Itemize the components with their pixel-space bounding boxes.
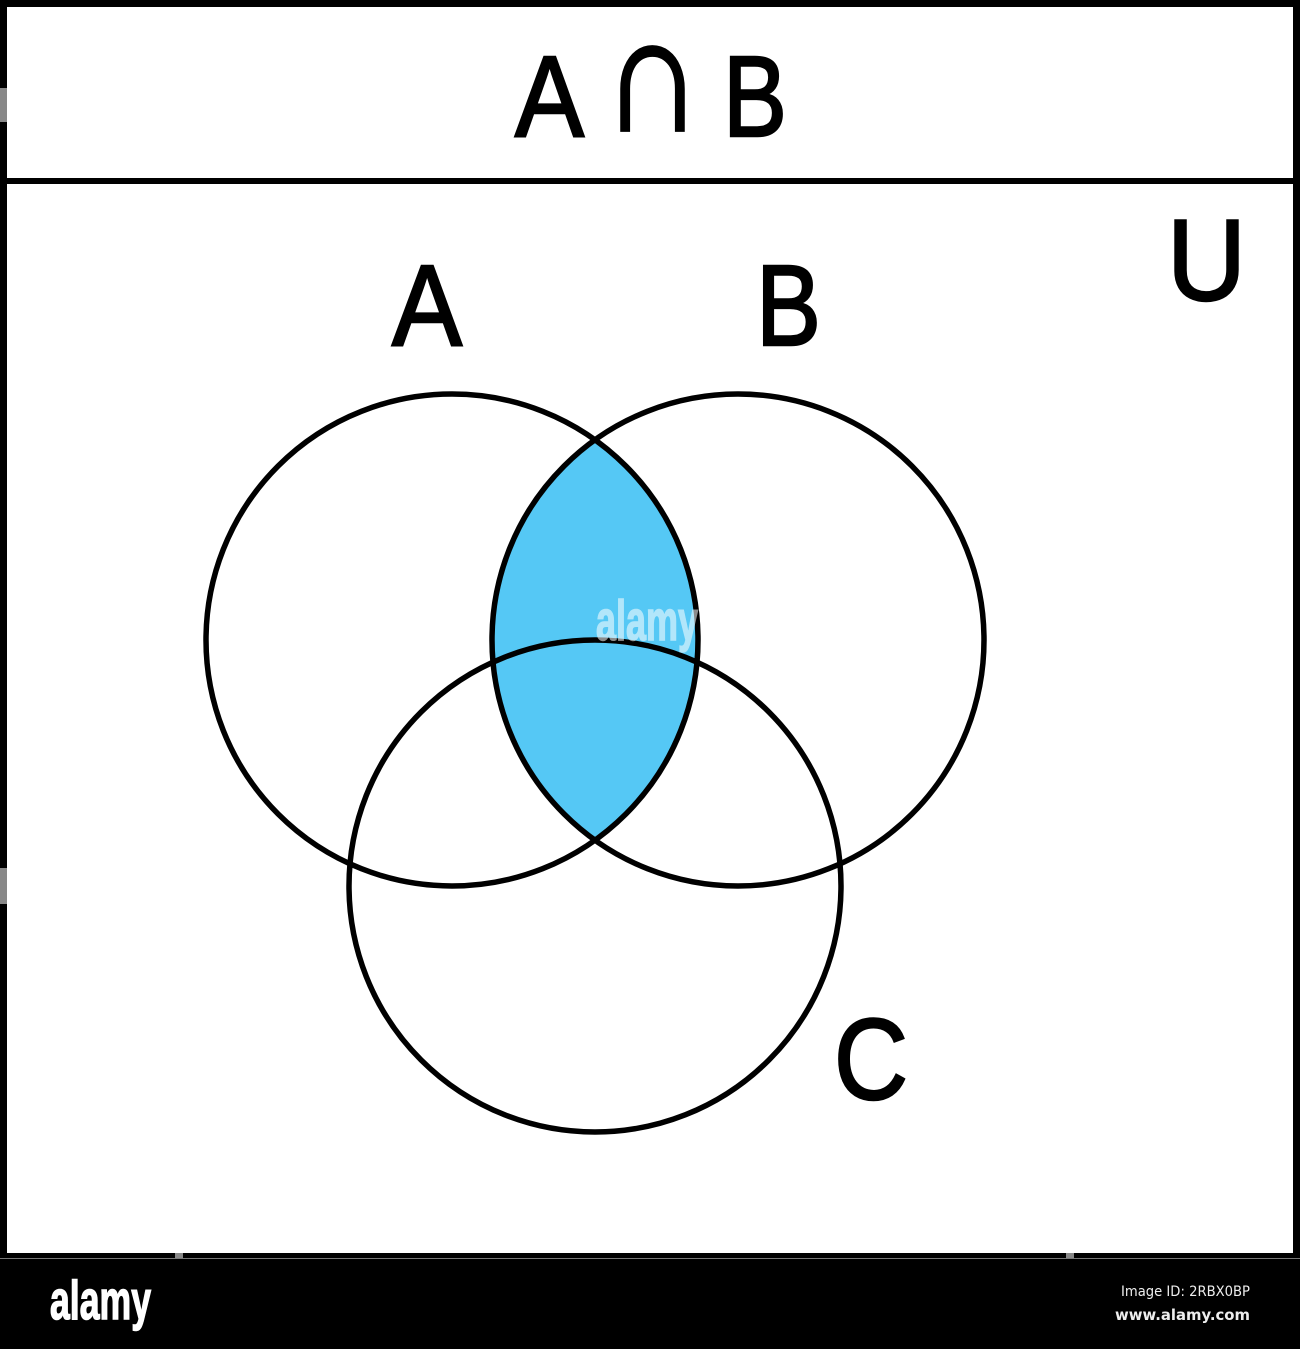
title: A intersect B bbox=[515, 0, 787, 165]
footer logo: alamy bbox=[50, 1269, 151, 1331]
title bar divider bbox=[4, 178, 1296, 184]
circle A bbox=[206, 394, 698, 886]
circle C bbox=[349, 640, 841, 1132]
circle B bbox=[492, 394, 984, 886]
image id: Image ID: 2RBX0BP bbox=[1121, 1284, 1250, 1300]
label B: B bbox=[756, 242, 821, 370]
title: A intersect B: B bbox=[723, 33, 787, 161]
label C: C bbox=[834, 996, 908, 1124]
label A: A bbox=[392, 242, 462, 370]
label U: U bbox=[1167, 197, 1246, 325]
watermark: alamy bbox=[596, 589, 698, 653]
shaded intersection of A and B bbox=[492, 440, 698, 840]
title: A intersect B: A bbox=[515, 33, 584, 161]
website: www.alamy.com bbox=[1115, 1306, 1250, 1324]
